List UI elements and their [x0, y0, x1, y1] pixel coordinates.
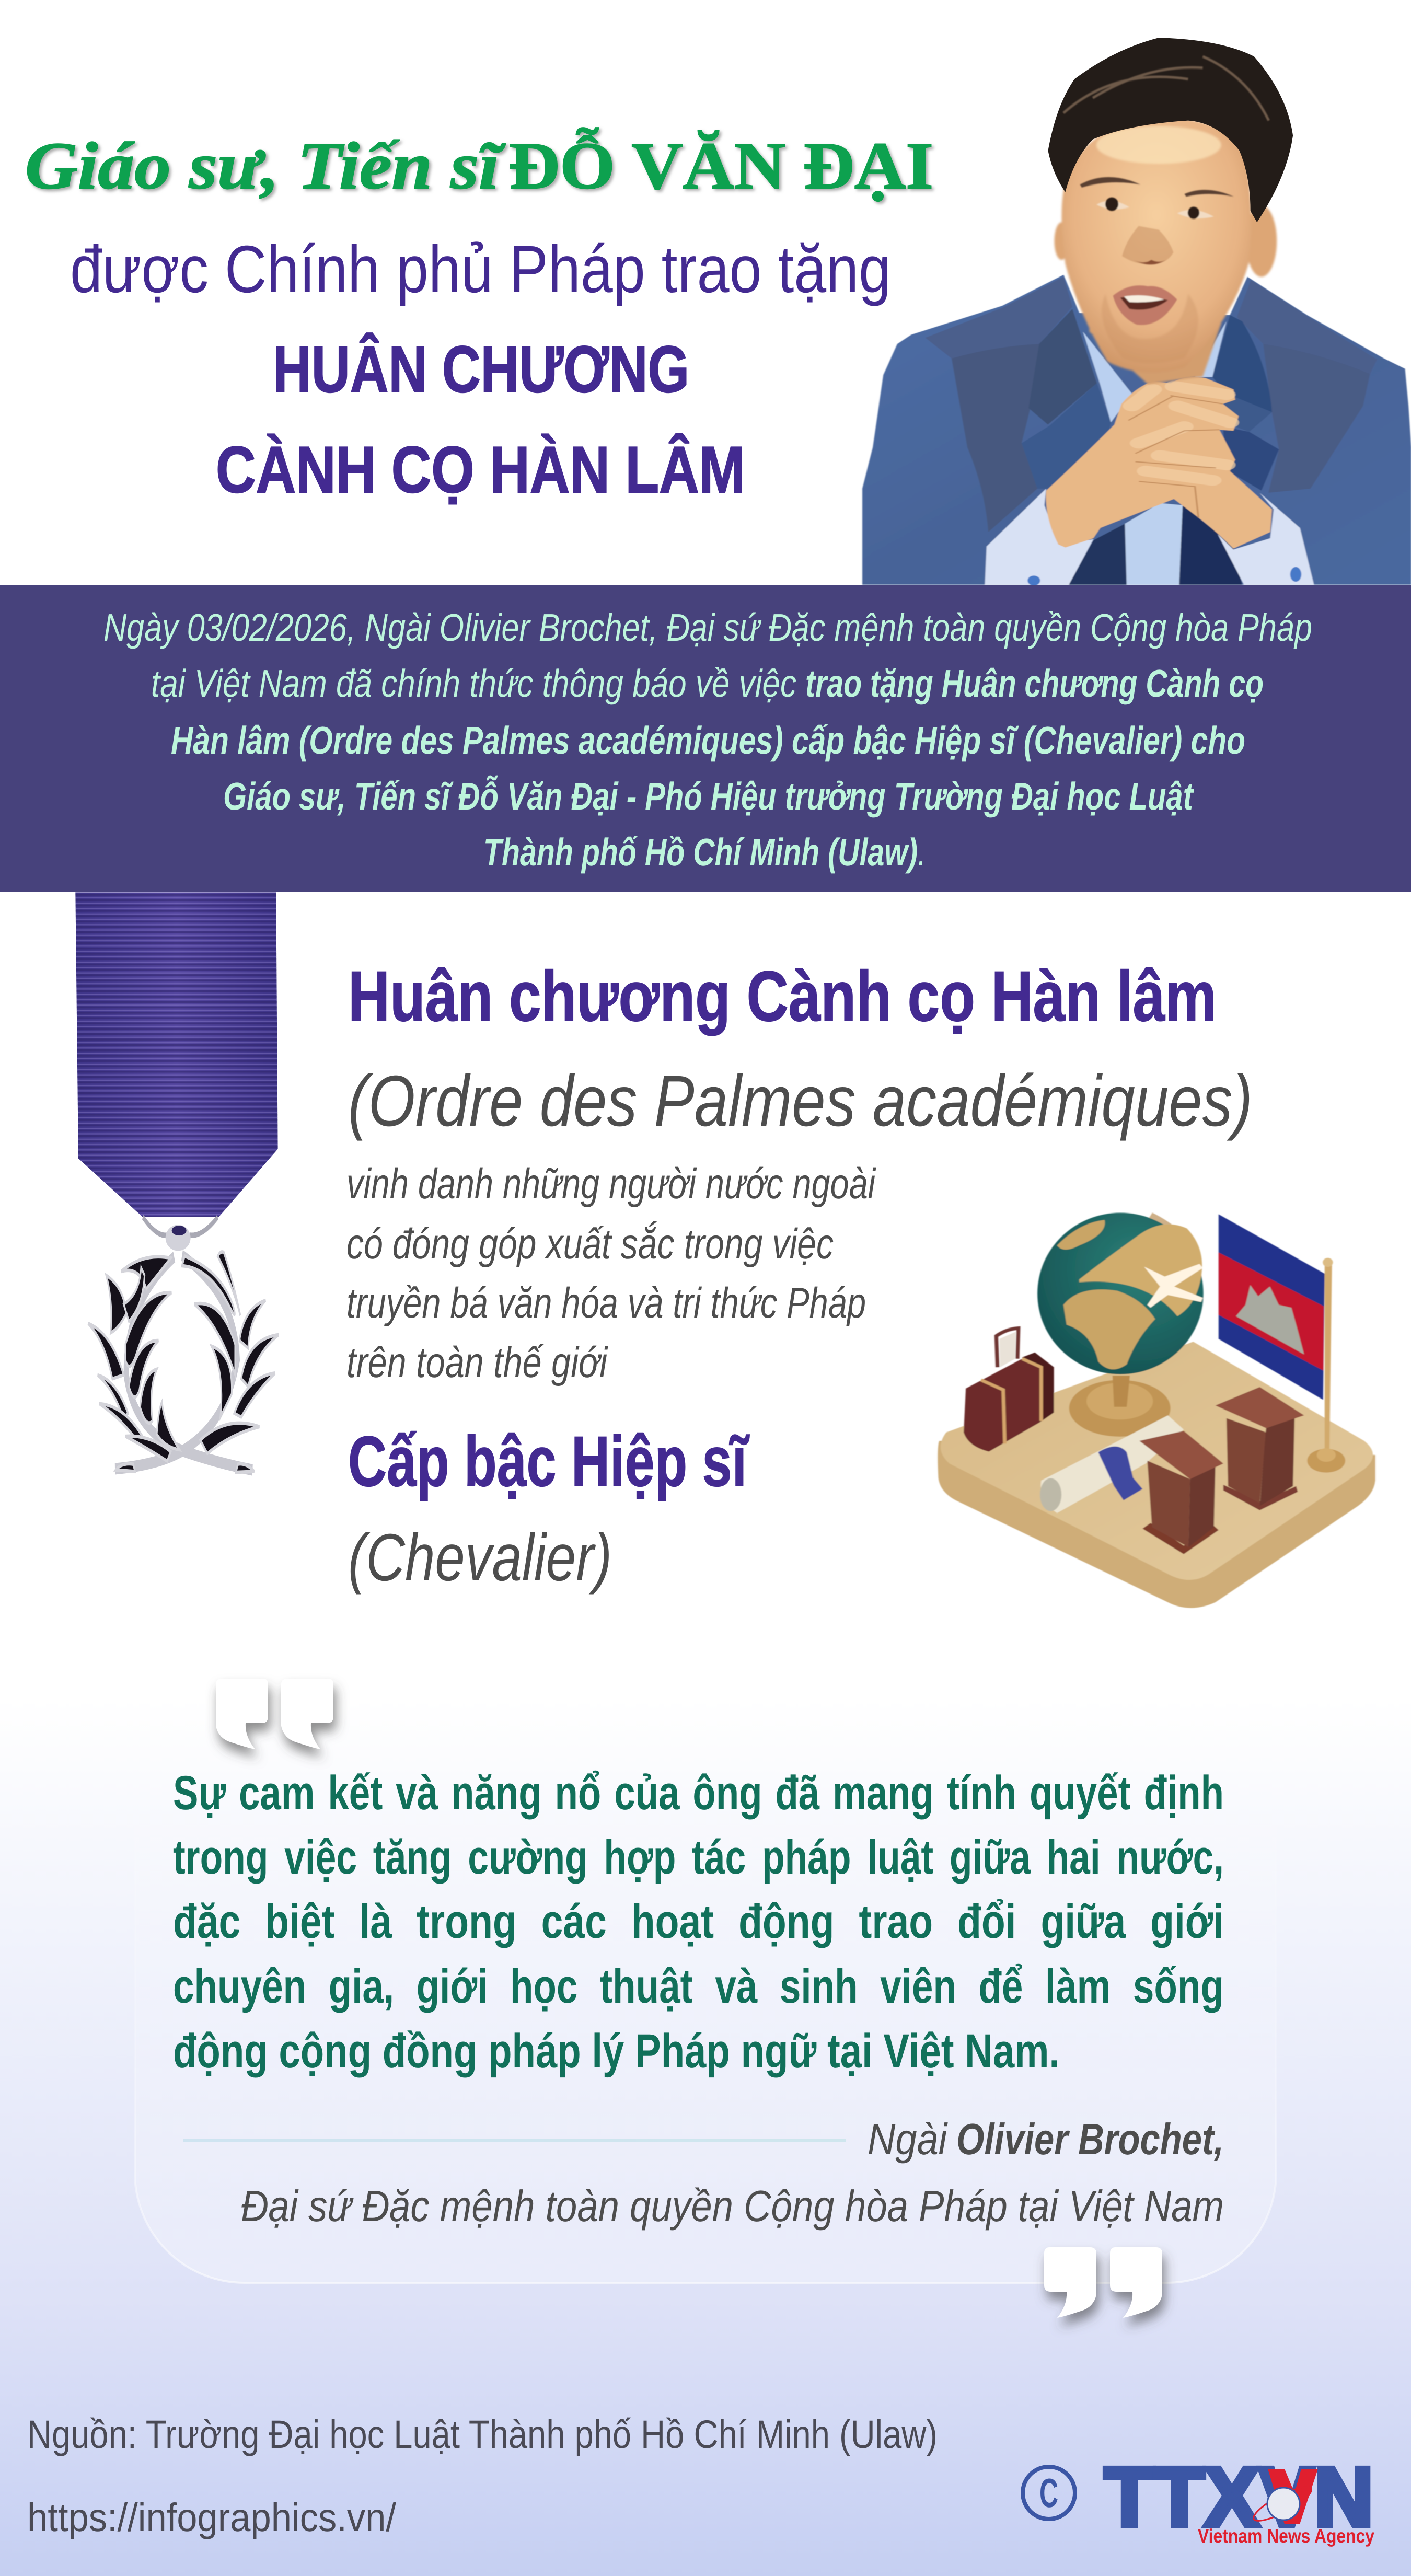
intro text: [103, 606, 1312, 874]
illustration: wooden base with globe, flag, suitcase, diploma and podiums: [938, 1213, 1375, 1608]
medal description: có đóng góp xuất sắc trong việc: [346, 1220, 834, 1268]
podium, back: [1223, 1485, 1298, 1510]
logo: TTXVN Vietnam News Agency: Vietnam News Agency: [1198, 2525, 1374, 2547]
globe: [1037, 1213, 1204, 1374]
logo: TTXVN Vietnam News Agency: TTXVN: [1104, 2450, 1373, 2544]
intro text: tại Việt Nam đã chính thức thông báo về việc: [151, 662, 796, 705]
medal description: trên toàn thế giới: [346, 1339, 608, 1387]
website url: https://infographics.vn/: [27, 2496, 397, 2540]
title line: name in green: ĐỖ VĂN ĐẠI: [508, 128, 933, 203]
diploma scroll: [1041, 1415, 1184, 1513]
wooden base: [938, 1441, 1375, 1608]
quote text: [173, 1766, 1224, 2078]
subheading: French name: (Ordre des Palmes académiques): [348, 1061, 1253, 1141]
attribution: Đại sứ Đặc mệnh toàn quyền Cộng hòa Pháp tại Việt Nam: [241, 2181, 1224, 2231]
portrait of Professor Do Van Dai: [862, 38, 1411, 585]
attribution: [183, 2115, 1224, 2231]
heading: medal name: Huân chương Cành cọ Hàn lâm: [348, 956, 1217, 1036]
quote card: [135, 1705, 1276, 2283]
title line: medal name 1: HUÂN CHƯƠNG: [273, 332, 689, 406]
ring and bead: [143, 1217, 218, 1251]
ribbon: [75, 892, 278, 1217]
icon: copyright symbol: C: [1039, 2470, 1058, 2516]
intro band: [0, 585, 1411, 892]
title line: name in green: [25, 128, 933, 203]
body: suit, shirt and clasped hands: [862, 275, 1411, 585]
heading: rank: Cấp bậc Hiệp sĩ: [348, 1422, 749, 1501]
closing quote mark: [1044, 2247, 1162, 2318]
opening quote mark: [216, 1679, 333, 1749]
head: neck, face, hair: [1048, 38, 1293, 384]
medal description: [346, 1160, 876, 1387]
globe stand: [1069, 1380, 1171, 1437]
medal description: vinh danh những người nước ngoài: [346, 1160, 876, 1208]
subheading: Chevalier: (Chevalier): [348, 1520, 612, 1595]
title line: awarded by French government: được Chính phủ Pháp trao tặng: [70, 232, 891, 307]
intro text: Thành phố Hồ Chí Minh (Ulaw).: [483, 830, 926, 874]
suitcase: [996, 1328, 1019, 1367]
clasped hands: [1046, 377, 1272, 549]
source line: Nguồn: Trường Đại học Luật Thành phố Hồ Chí Minh (Ulaw): [27, 2412, 938, 2457]
intro text: trao tặng Huân chương Cành cọ: [805, 662, 1264, 705]
attribution: Olivier Brochet,: [956, 2115, 1224, 2164]
medal description: truyền bá văn hóa và tri thức Pháp: [346, 1279, 866, 1327]
flag pole: [1325, 1265, 1332, 1452]
attribution: Ngài: [868, 2115, 948, 2164]
title line: name in green: Giáo sư, Tiến sĩ: [25, 129, 506, 203]
podium, front: [1142, 1523, 1219, 1554]
palm wreath: [88, 1252, 279, 1472]
title line: medal name 2: CÀNH CỌ HÀN LÂM: [216, 433, 745, 506]
flag of Cambodia: [1219, 1214, 1325, 1400]
title block: [25, 128, 933, 506]
quote text: động cộng đồng pháp lý Pháp ngữ tại Việt Nam.: [173, 2025, 1060, 2078]
medal: Ordre des Palmes academiques: [75, 892, 279, 1472]
icon: copyright symbol: [1023, 2467, 1075, 2519]
